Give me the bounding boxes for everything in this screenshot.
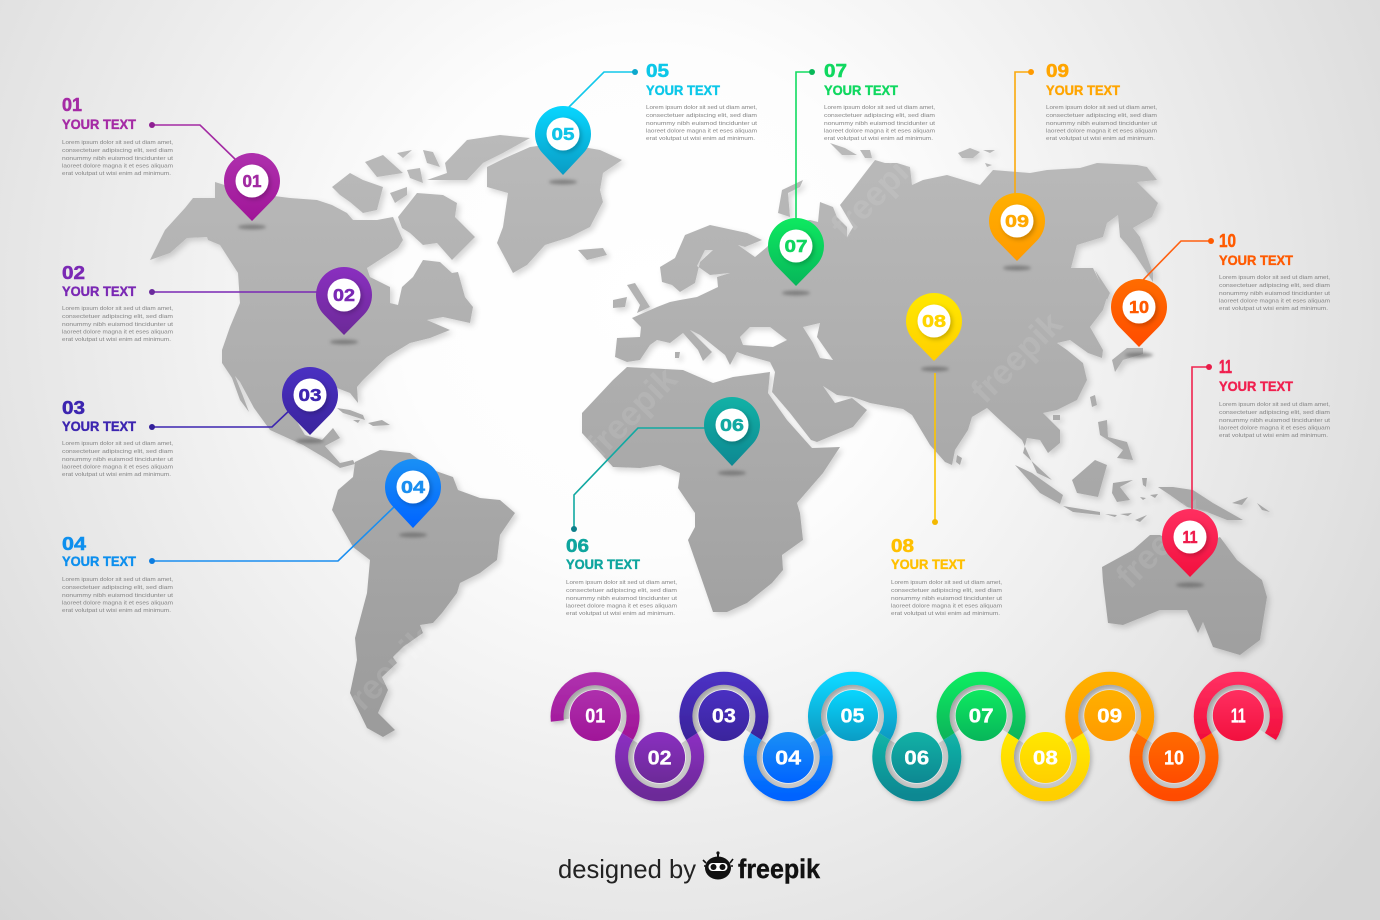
text block 09: erat volutpat ut wisi enim ad minimum. (1046, 136, 1155, 142)
European and Arctic islands (578, 143, 995, 358)
line 05 (566, 69, 638, 110)
text block 06: consectetuer adipiscing elit, sed diam (566, 588, 677, 594)
text block 08: nonummy nibh euismod tincidunter ut (891, 596, 1002, 602)
step 03: 03 (712, 706, 736, 728)
text block 09: consectetuer adipiscing elit, sed diam (1046, 113, 1157, 119)
text block 10: 10 (1219, 231, 1236, 251)
text block 02: YOUR TEXT (62, 284, 137, 299)
pin 03: 03 (298, 385, 322, 405)
line 06 (571, 428, 706, 532)
pin 01 (224, 153, 280, 221)
text block 09: Lorem ipsum dolor sit sed ut diam amet, (1046, 105, 1157, 111)
text block 08: Lorem ipsum dolor sit sed ut diam amet, (891, 580, 1002, 586)
text block 05 (646, 61, 757, 142)
text block 06: YOUR TEXT (566, 557, 641, 572)
timeline snake (557, 678, 1276, 795)
text block 09: 09 (1046, 61, 1069, 81)
step 05 (827, 690, 878, 741)
text block 06: laoreet dolore magna it et eses aliquam (566, 604, 677, 610)
step 11 (1213, 690, 1264, 741)
pin 02 (316, 267, 372, 335)
text block 01: 01 (62, 95, 82, 115)
text block 01: erat volutpat ut wisi enim ad minimum. (62, 171, 171, 177)
watermarks: freepik (1109, 490, 1215, 596)
New Guinea (1158, 487, 1270, 520)
text block 11: YOUR TEXT (1219, 379, 1294, 394)
designed by: designed by (558, 854, 696, 884)
pin 06: 06 (720, 415, 744, 435)
text block 03: laoreet dolore magna it et eses aliquam (62, 464, 173, 470)
watermarks: freepik (824, 140, 930, 246)
icon: freepik logo (703, 851, 733, 880)
text block 03: erat volutpat ut wisi enim ad minimum. (62, 472, 171, 478)
pin 11 (1162, 509, 1218, 577)
text block 04: laoreet dolore magna it et eses aliquam (62, 600, 173, 606)
text block 10: YOUR TEXT (1219, 253, 1294, 268)
step 10 (1148, 732, 1200, 783)
text block 10: erat volutpat ut wisi enim ad minimum. (1219, 306, 1328, 312)
text block 04: 04 (62, 534, 86, 554)
text block 02: laoreet dolore magna it et eses aliquam (62, 330, 173, 336)
text block 08 (891, 536, 1002, 617)
text block 02: 02 (62, 263, 85, 283)
pin 04 (385, 459, 441, 528)
pin 06 (704, 397, 760, 466)
step 05: 05 (840, 706, 864, 728)
step 06 (891, 732, 942, 783)
text block 11: nonummy nibh euismod tincidunter ut (1219, 418, 1330, 424)
text block 07 (824, 61, 935, 142)
step 07: 07 (969, 706, 994, 728)
South America (332, 450, 515, 737)
step 07 (956, 690, 1007, 741)
text block 01: laoreet dolore magna it et eses aliquam (62, 164, 173, 170)
text block 06: Lorem ipsum dolor sit sed ut diam amet, (566, 580, 677, 586)
text block 04: nonummy nibh euismod tincidunter ut (62, 593, 173, 599)
text block 08: laoreet dolore magna it et eses aliquam (891, 604, 1002, 610)
line 08 (932, 373, 938, 525)
timeline grey inner arcs (566, 686, 1267, 787)
pin 09: 09 (1005, 211, 1029, 231)
pin 08: 08 (922, 311, 946, 331)
text block 02: Lorem ipsum dolor sit sed ut diam amet, (62, 306, 173, 312)
pin 03 (282, 367, 338, 435)
line 01 (149, 122, 236, 160)
text block 01: Lorem ipsum dolor sit sed ut diam amet, (62, 140, 173, 146)
text block 07: Lorem ipsum dolor sit sed ut diam amet, (824, 105, 935, 111)
line 10 (1143, 238, 1214, 280)
line 03 (149, 408, 292, 430)
text block 07: YOUR TEXT (824, 83, 899, 98)
text block 03: YOUR TEXT (62, 419, 137, 434)
step 04 (763, 732, 814, 783)
text block 05: consectetuer adipiscing elit, sed diam (646, 113, 757, 119)
text block 08: consectetuer adipiscing elit, sed diam (891, 588, 1002, 594)
text block 06: erat volutpat ut wisi enim ad minimum. (566, 611, 675, 617)
Australia (1102, 535, 1267, 655)
text block 11: consectetuer adipiscing elit, sed diam (1219, 410, 1330, 416)
text block 03: consectetuer adipiscing elit, sed diam (62, 449, 173, 455)
step 09: 09 (1097, 706, 1122, 728)
line 02 (149, 289, 320, 295)
text block 10 (1219, 231, 1330, 312)
text block 10: nonummy nibh euismod tincidunter ut (1219, 291, 1330, 297)
text block 07: erat volutpat ut wisi enim ad minimum. (824, 136, 933, 142)
text block 03: 03 (62, 398, 85, 418)
Greenland (487, 143, 622, 273)
pin 08 (906, 293, 962, 361)
text block 01: YOUR TEXT (62, 117, 137, 132)
line 04 (149, 507, 394, 564)
text block 03: nonummy nibh euismod tincidunter ut (62, 457, 173, 463)
pin 09 (989, 193, 1045, 261)
text block 11: 11 (1219, 357, 1232, 377)
text block 08: 08 (891, 536, 914, 556)
pin 04: 04 (401, 477, 425, 497)
pin 05 (535, 106, 591, 175)
text block 10: laoreet dolore magna it et eses aliquam (1219, 298, 1330, 304)
step 08: 08 (1033, 748, 1058, 770)
text block 05: laoreet dolore magna it et eses aliquam (646, 128, 757, 134)
text block 05: nonummy nibh euismod tincidunter ut (646, 121, 757, 127)
pin 10 (1111, 279, 1167, 347)
text block 11: Lorem ipsum dolor sit sed ut diam amet, (1219, 402, 1330, 408)
East Asian islands (956, 270, 1143, 465)
text block 05: YOUR TEXT (646, 83, 721, 98)
Caribbean islands (337, 408, 390, 426)
text block 05: Lorem ipsum dolor sit sed ut diam amet, (646, 105, 757, 111)
text block 09: nonummy nibh euismod tincidunter ut (1046, 121, 1157, 127)
step 01 (570, 690, 621, 741)
watermarks: freepik (964, 305, 1070, 411)
text block 03 (62, 398, 173, 478)
text block 04: Lorem ipsum dolor sit sed ut diam amet, (62, 577, 173, 583)
text block 09 (1046, 61, 1157, 142)
step 10: 10 (1164, 748, 1184, 770)
text block 02: erat volutpat ut wisi enim ad minimum. (62, 337, 171, 343)
text block 07: laoreet dolore magna it et eses aliquam (824, 128, 935, 134)
text block 06: nonummy nibh euismod tincidunter ut (566, 596, 677, 602)
Arctic Canada islands (332, 135, 530, 260)
text block 04: YOUR TEXT (62, 554, 137, 569)
text block 04 (62, 534, 173, 614)
text block 10: consectetuer adipiscing elit, sed diam (1219, 283, 1330, 289)
text block 10: Lorem ipsum dolor sit sed ut diam amet, (1219, 275, 1330, 281)
Southeast Asian islands (1015, 420, 1158, 522)
text block 05: erat volutpat ut wisi enim ad minimum. (646, 136, 755, 142)
watermarks: freepik (579, 360, 685, 466)
text block 11: laoreet dolore magna it et eses aliquam (1219, 426, 1330, 432)
line 07 (796, 69, 815, 222)
step 11: 11 (1231, 706, 1246, 728)
line 11 (1192, 364, 1212, 512)
pin shadows (238, 180, 1204, 588)
watermarks: freepik (334, 620, 440, 726)
pin 11: 11 (1182, 527, 1198, 547)
line 09 (1015, 69, 1034, 196)
pin 02: 02 (333, 285, 355, 305)
step 04: 04 (775, 748, 802, 770)
text block 06: 06 (566, 536, 589, 556)
text block 11 (1219, 357, 1330, 439)
step 03 (698, 690, 749, 741)
text block 06 (566, 536, 677, 617)
leader lines (149, 69, 1214, 564)
text block 07: consectetuer adipiscing elit, sed diam (824, 113, 935, 119)
pin 10: 10 (1129, 297, 1149, 317)
timeline ribbon (557, 678, 1276, 795)
text block 01: nonummy nibh euismod tincidunter ut (62, 156, 173, 162)
text block 09: YOUR TEXT (1046, 83, 1121, 98)
freepik wordmark: freepik (738, 854, 821, 884)
Eurasia (615, 160, 1158, 480)
text block 07: nonummy nibh euismod tincidunter ut (824, 121, 935, 127)
watermarks (334, 140, 1215, 726)
step 09 (1084, 690, 1135, 741)
text block 03: Lorem ipsum dolor sit sed ut diam amet, (62, 441, 173, 447)
text block 04: erat volutpat ut wisi enim ad minimum. (62, 608, 171, 614)
text block 01: consectetuer adipiscing elit, sed diam (62, 148, 173, 154)
pin 01: 01 (242, 171, 262, 191)
step 02 (634, 732, 685, 783)
step 08 (1020, 732, 1071, 783)
text block 09: laoreet dolore magna it et eses aliquam (1046, 128, 1157, 134)
step 06: 06 (904, 748, 929, 770)
world map (150, 135, 1270, 737)
text block 11: erat volutpat ut wisi enim ad minimum. (1219, 433, 1328, 439)
step 01: 01 (585, 706, 605, 728)
pin 07 (768, 218, 824, 286)
text block 02 (62, 263, 173, 343)
text block 07: 07 (824, 61, 847, 81)
footer credit (558, 851, 821, 884)
pin 05: 05 (552, 124, 575, 144)
text block 08: YOUR TEXT (891, 557, 966, 572)
text block 02: nonummy nibh euismod tincidunter ut (62, 322, 173, 328)
text block 05: 05 (646, 61, 669, 81)
text block 01 (62, 95, 173, 177)
Africa (582, 367, 840, 612)
North America (150, 182, 473, 468)
text block 02: consectetuer adipiscing elit, sed diam (62, 314, 173, 320)
pin 07: 07 (784, 236, 808, 256)
step 02: 02 (648, 748, 672, 770)
text block 04: consectetuer adipiscing elit, sed diam (62, 585, 173, 591)
text block 08: erat volutpat ut wisi enim ad minimum. (891, 611, 1000, 617)
